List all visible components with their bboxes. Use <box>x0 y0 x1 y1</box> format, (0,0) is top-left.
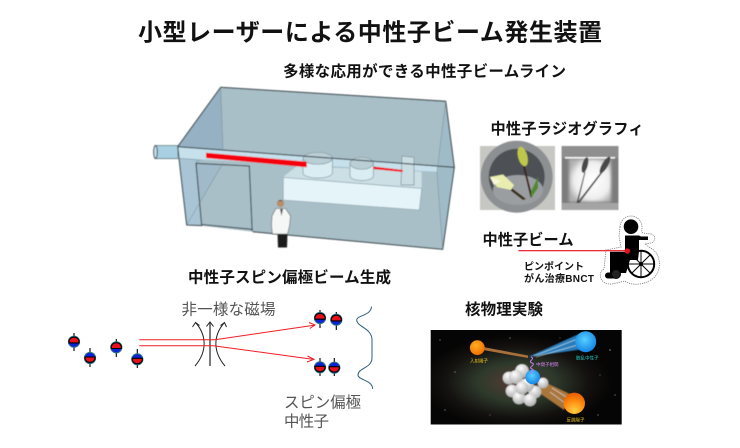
stars <box>440 338 616 416</box>
panel: facility building <box>154 87 454 249</box>
photo: neutron radiograph <box>562 146 618 210</box>
shield block top <box>283 166 422 188</box>
door upper triangle <box>196 163 223 203</box>
label: non-uniform magnetic field: 非一様な磁場 <box>182 300 276 318</box>
heading: nuclear physics: 核物理実験 <box>465 300 543 318</box>
panel: nuclear physics image <box>431 330 622 424</box>
body <box>610 236 648 273</box>
icon: researcher figure <box>272 200 290 248</box>
dashed outline <box>600 216 659 284</box>
label: BNCT <box>524 261 594 285</box>
recoil proton <box>564 393 585 414</box>
label: neutron beam: 中性子ビーム <box>482 231 574 249</box>
struck neutron <box>525 370 540 384</box>
small wheel <box>612 270 620 278</box>
scattered neutron <box>575 331 596 352</box>
label: spin polarised neutrons: 中性子 <box>284 412 329 430</box>
shield block front <box>283 178 422 210</box>
diagram: polarised neutrons <box>314 310 342 376</box>
nucleus cluster <box>502 364 548 406</box>
label: spin polarised neutrons: スピン偏極 <box>284 394 361 412</box>
room edges <box>178 87 454 249</box>
foot <box>605 272 619 278</box>
head <box>624 219 638 234</box>
meson wave <box>530 357 533 374</box>
target plate <box>401 156 414 185</box>
tiny labels: 中間子相関 <box>536 361 559 368</box>
front door jamb <box>178 147 201 226</box>
label: BNCT: ピンポイント <box>524 261 584 273</box>
incoming beam <box>483 347 528 358</box>
label: BNCT: がん治療BNCT <box>524 272 594 285</box>
red laser beam long <box>206 153 307 167</box>
cylinder 2 <box>350 157 373 180</box>
heading: spin polarised beam: 中性子スピン偏極ビーム生成 <box>188 268 391 286</box>
subtitle: beam lines: 多様な応用ができる中性子ビームライン <box>283 62 566 80</box>
cylinder 1 <box>303 152 332 178</box>
background nebula <box>431 330 622 424</box>
tiny labels: 散乱中性子 <box>576 354 599 362</box>
arrow: beam into patient <box>518 248 630 254</box>
right wall <box>437 101 454 249</box>
tiny labels <box>470 354 599 424</box>
recoil beam <box>538 380 570 410</box>
incoming proton <box>470 340 485 355</box>
diagram: brace <box>357 306 373 389</box>
scattered beam <box>528 334 584 357</box>
photo: lily flower <box>480 141 555 213</box>
beam pipe outside <box>154 146 178 159</box>
label: spin polarised neutrons <box>284 394 361 430</box>
inner thin edges <box>178 87 446 249</box>
diagram: incoming neutrons <box>68 333 143 368</box>
title: 小型レーザーによる中性子ビーム発生装置 <box>138 20 602 46</box>
red laser beam short <box>373 166 403 172</box>
arrows: split red beams <box>139 322 315 362</box>
left wall <box>178 87 223 225</box>
beam pipe inside <box>178 147 437 172</box>
diagram: magnetic field lines <box>192 322 226 366</box>
tiny labels: 入射陽子 <box>470 358 488 364</box>
tiny labels: 反跳陽子 <box>566 416 585 424</box>
room silhouette <box>178 87 454 249</box>
icon: wheelchair patient <box>600 216 659 284</box>
large wheel <box>628 251 654 277</box>
heading: neutron radiography: 中性子ラジオグラフィ <box>490 120 644 138</box>
